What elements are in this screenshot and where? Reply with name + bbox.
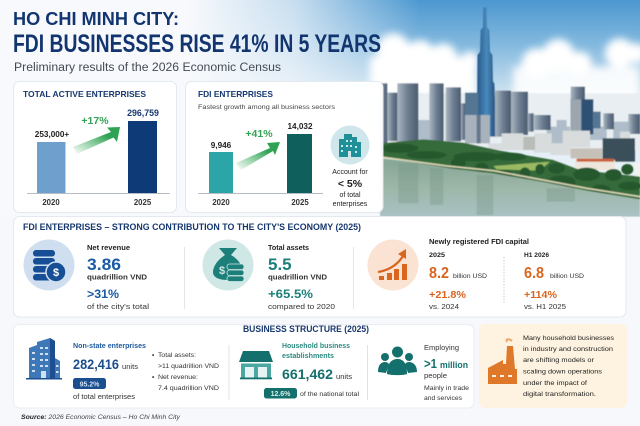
icon: coins: $ bbox=[53, 267, 59, 279]
bar chart: total active enterprises bbox=[27, 108, 170, 207]
subheading: Fastest growth among all business sectors bbox=[198, 104, 336, 111]
stat: non-state enterprises: of total enterprises bbox=[73, 394, 136, 401]
stat: non-state enterprises bbox=[73, 343, 146, 401]
icon: tower block bbox=[26, 338, 62, 380]
stat: household business establishments: 661,462 bbox=[282, 366, 333, 382]
list: assets and revenue: Net revenue: bbox=[158, 374, 198, 381]
stat: newly registered FDI capital: 2025 bbox=[429, 252, 445, 259]
callout: share of total: Account for bbox=[332, 169, 368, 176]
list: assets and revenue: Total assets: bbox=[158, 352, 196, 359]
stat: household business establishments: units bbox=[336, 374, 353, 381]
callout: share of total: of total bbox=[339, 192, 361, 199]
stat: household business establishments: 12.6% bbox=[271, 391, 291, 398]
distant buildings bbox=[418, 120, 630, 143]
stat: household business establishments: of the national total bbox=[300, 391, 360, 398]
stat: non-state enterprises: 95.2% bbox=[80, 382, 100, 388]
title: FDI BUSINESSES RISE 41% IN 5 YEARS bbox=[13, 30, 381, 58]
stat: household business establishments: establishments bbox=[282, 353, 334, 360]
title: HO CHI MINH CITY: bbox=[13, 9, 179, 29]
stat: newly registered FDI capital: 8.2 bbox=[429, 265, 449, 282]
stat: total assets: compared to 2020 bbox=[268, 302, 335, 311]
bar chart: FDI enterprises bbox=[198, 122, 323, 207]
icon: money bag: $ bbox=[219, 265, 225, 277]
text block: household shift: scaling down operations bbox=[523, 368, 603, 376]
stat: total assets: 5.5 bbox=[268, 255, 292, 274]
text block: household shift: in industry and construction bbox=[523, 346, 613, 353]
title bbox=[13, 9, 381, 58]
stat: total assets: quadrillion VND bbox=[268, 272, 327, 282]
text block: household shift: digital transformation. bbox=[523, 391, 596, 398]
stat: net revenue: >31% bbox=[87, 287, 119, 301]
panel: household business callout bbox=[479, 324, 627, 408]
stat: newly registered FDI capital: billion USD bbox=[453, 273, 487, 280]
stat: employing: million bbox=[440, 360, 468, 370]
text block: household shift: are shifting models or bbox=[523, 357, 595, 364]
stat: net revenue bbox=[87, 245, 149, 311]
stat: total assets bbox=[268, 245, 335, 311]
stat: net revenue: Net revenue bbox=[87, 245, 130, 252]
bar chart: FDI enterprises: 2025 bbox=[291, 198, 309, 207]
text block: household shift: Many household businesses bbox=[523, 335, 615, 342]
heading: strong contribution: FDI ENTERPRISES – STRONG CONTRIBUTION TO THE CITY'S ECONOMY (2025) bbox=[23, 222, 361, 232]
list: assets and revenue: >11 quadrillion VND bbox=[158, 363, 219, 370]
icon: office buildings bbox=[330, 126, 370, 164]
stat: net revenue: of the city's total bbox=[87, 302, 149, 311]
list: assets and revenue bbox=[152, 352, 219, 392]
stat: newly registered FDI capital: 6.8 bbox=[524, 265, 544, 282]
stat: employing: >1 bbox=[424, 356, 437, 371]
icon: people bbox=[378, 346, 417, 375]
icon: money bag bbox=[202, 240, 254, 290]
stat: newly registered FDI capital: vs. H1 2025 bbox=[524, 302, 566, 311]
heading: business structure: BUSINESS STRUCTURE (2025) bbox=[243, 324, 369, 334]
photo: Ho Chi Minh City skyline bbox=[0, 0, 640, 218]
stat: net revenue: 3.86 bbox=[87, 255, 121, 274]
stat: employing: and services bbox=[424, 395, 462, 402]
low-rise buildings bbox=[488, 131, 630, 158]
callout: share of total bbox=[332, 169, 368, 208]
callout: share of total: < 5% bbox=[338, 178, 363, 190]
list: assets and revenue: • bbox=[152, 352, 155, 359]
panel: business structure bbox=[14, 324, 474, 408]
heading: FDI enterprises: FDI ENTERPRISES bbox=[198, 89, 273, 99]
tower bbox=[477, 7, 497, 137]
panel: FDI enterprises bbox=[186, 82, 383, 212]
stat: employing: Employing bbox=[424, 345, 459, 352]
icon: coins bbox=[24, 240, 74, 290]
stat: non-state enterprises: units bbox=[122, 364, 139, 371]
stat: non-state enterprises: Non-state enterprises bbox=[73, 343, 146, 350]
stat: total assets: Total assets bbox=[268, 245, 309, 252]
bar chart: total active enterprises: 2020 bbox=[42, 198, 60, 207]
stat: employing: Mainly in trade bbox=[424, 385, 470, 392]
bar chart: FDI enterprises: 14,032 bbox=[287, 122, 313, 131]
bar chart: total active enterprises: 253,000+ bbox=[35, 130, 69, 139]
text block: household shift bbox=[523, 335, 615, 398]
arrow: growth 41% bbox=[236, 128, 280, 170]
heading: total active enterprises: TOTAL ACTIVE ENTERPRISES bbox=[23, 89, 146, 99]
list: assets and revenue: 7.4 quadrillion VND bbox=[158, 385, 219, 392]
arrow: growth 41%: +41% bbox=[245, 128, 273, 140]
bar chart: FDI enterprises: 9,946 bbox=[211, 141, 232, 150]
stat: household business establishments bbox=[264, 343, 360, 398]
stat: employing bbox=[424, 345, 470, 402]
stat: newly registered FDI capital: billion USD bbox=[550, 273, 584, 280]
subtitle: Preliminary results of the 2026 Economic Census bbox=[14, 62, 281, 74]
stat: employing: people bbox=[424, 373, 447, 380]
panel: strong contribution bbox=[14, 216, 626, 317]
bar chart: total active enterprises: 296,759 bbox=[127, 108, 159, 118]
icon: factory bbox=[488, 339, 517, 384]
stat: net revenue: quadrillion VND bbox=[87, 272, 147, 282]
trees and lawn bbox=[380, 139, 640, 200]
stat: newly registered FDI capital: Newly registered FDI capital bbox=[429, 239, 529, 246]
text block: household shift: under the impact of bbox=[523, 380, 587, 387]
source note: Source: 2026 Economic Census – Ho Chi Minh City bbox=[21, 414, 181, 421]
stat: non-state enterprises: 282,416 bbox=[73, 356, 119, 372]
arrow: growth 17% bbox=[73, 115, 120, 154]
stat: newly registered FDI capital bbox=[429, 239, 584, 311]
stat: newly registered FDI capital: +21.8% bbox=[429, 289, 467, 301]
stat: newly registered FDI capital: vs. 2024 bbox=[429, 302, 459, 311]
stat: total assets: +65.5% bbox=[268, 287, 313, 301]
panel: total active enterprises bbox=[14, 82, 176, 212]
bar chart: total active enterprises: 2025 bbox=[134, 198, 152, 207]
bar chart: FDI enterprises: 2020 bbox=[212, 198, 230, 207]
icon: shop bbox=[239, 351, 273, 379]
stat: household business establishments: Household business bbox=[282, 343, 350, 350]
list: assets and revenue: • bbox=[152, 374, 155, 381]
icon: rising chart bbox=[368, 240, 418, 290]
stat: newly registered FDI capital: H1 2026 bbox=[524, 252, 549, 259]
stat: newly registered FDI capital: +114% bbox=[524, 289, 558, 301]
callout: share of total: enterprises bbox=[333, 201, 368, 208]
arrow: growth 17%: +17% bbox=[81, 115, 109, 127]
river bbox=[380, 158, 640, 217]
